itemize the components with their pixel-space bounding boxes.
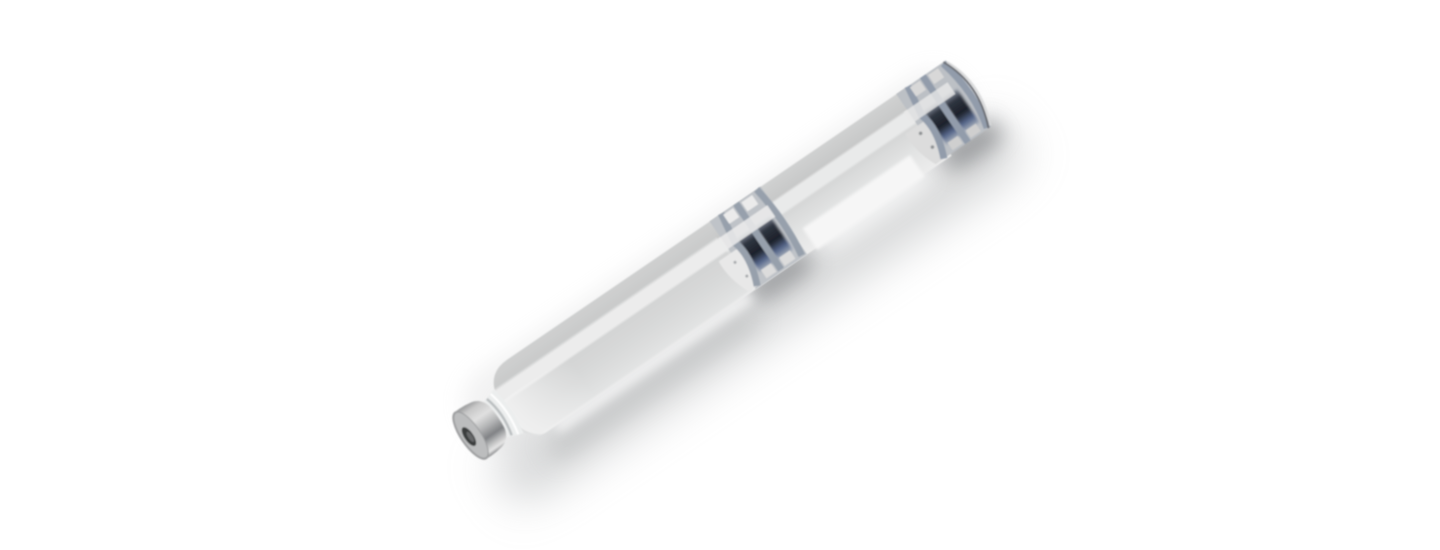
dark seals [737,229,774,272]
bright lower rear reflection [803,155,925,250]
glass barrel [482,88,953,446]
rear plunger [884,56,998,169]
rear glass rim [943,57,996,128]
glass neck [480,388,526,442]
grey sealing ribs [712,188,804,286]
cast shadow beneath the cartridge [439,46,1034,513]
front barrel section [482,220,758,444]
rear barrel section [707,88,952,291]
metal crimp cap [446,393,514,465]
cap centre hole [459,425,479,448]
cap front face [446,406,495,465]
middle plunger [697,187,807,298]
stopper end glow front [501,356,596,444]
reflective patches [723,208,739,224]
